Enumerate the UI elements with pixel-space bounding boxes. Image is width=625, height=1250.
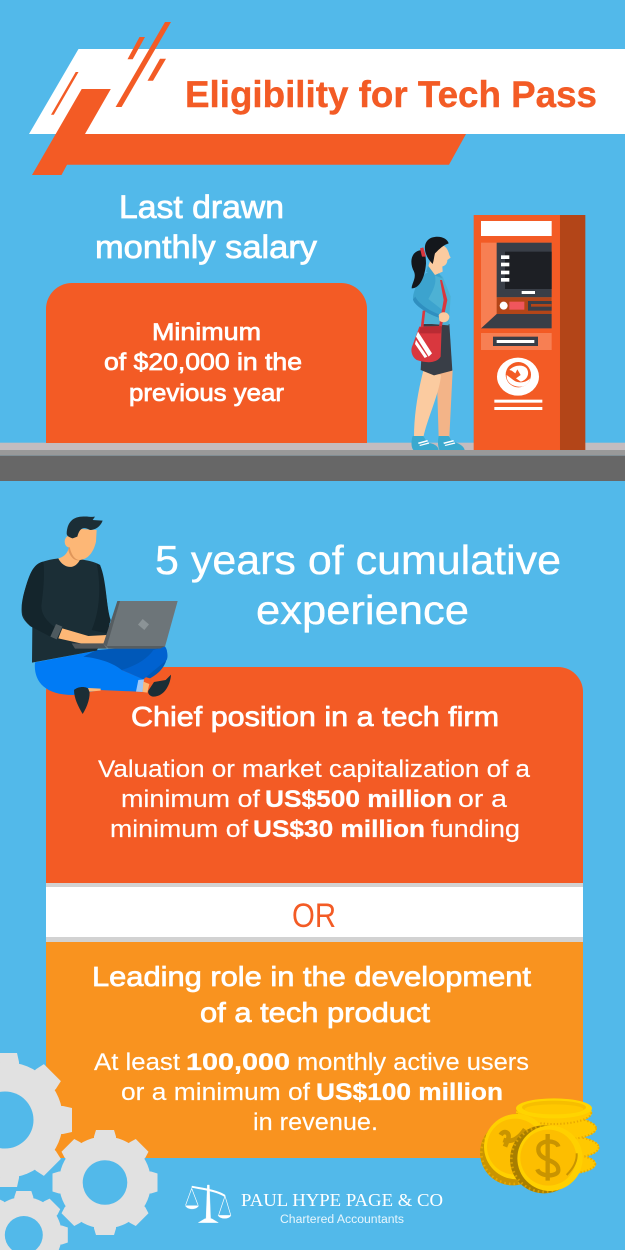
leading role heading: Leading role in the development (92, 961, 531, 992)
panel: chief position (46, 667, 583, 883)
icon: scales (185, 1185, 231, 1223)
heading: last drawn monthly salary: Last drawn (119, 189, 284, 225)
chief position text: minimum of (121, 786, 260, 813)
leading role text (94, 1049, 529, 1136)
OR divider (46, 883, 583, 942)
leading role heading (92, 961, 531, 1028)
leading role text: or a minimum of (121, 1079, 310, 1106)
OR divider: OR (292, 897, 336, 935)
logo: Paul Hype Page & Co (185, 1185, 443, 1226)
salary text: Minimum (152, 319, 261, 346)
chief position text: US$500 million (265, 786, 452, 813)
icon: gold coins (480, 1098, 599, 1193)
chief position text (98, 756, 531, 843)
leading role text: 100,000 (186, 1049, 290, 1076)
leading role text: US$100 million (316, 1079, 503, 1106)
chief position text: or a (458, 786, 508, 813)
chief position heading: Chief position in a tech firm (131, 701, 499, 732)
salary text: of $20,000 in the (104, 349, 302, 376)
salary text (104, 319, 302, 407)
panel: salary (46, 283, 367, 443)
title banner (29, 22, 625, 175)
tagline: Chartered Accountants (280, 1214, 404, 1226)
icon: man with laptop (22, 516, 178, 714)
panel: leading role (46, 942, 583, 1158)
title: Eligibility for Tech Pass (185, 74, 597, 115)
salary text: previous year (129, 380, 284, 407)
heading: last drawn monthly salary: monthly salary (95, 229, 317, 265)
leading role text: monthly active users (297, 1049, 529, 1076)
leading role text: in revenue. (253, 1109, 378, 1136)
chief position text: Valuation or market capitalization of a (98, 756, 531, 783)
chief position text: US$30 million (253, 816, 425, 843)
leading role text: At least (94, 1049, 180, 1076)
heading: last drawn monthly salary (95, 189, 317, 265)
icon: ATM machine (474, 215, 585, 450)
ground (0, 443, 625, 481)
company name: PAUL HYPE PAGE & CO (241, 1190, 443, 1210)
heading: 5 years of cumulative experience: 5 years of cumulative (155, 537, 561, 583)
heading: 5 years of cumulative experience (155, 537, 561, 633)
icon: medium gear (52, 1130, 158, 1235)
chief position text: funding (431, 816, 520, 843)
icon: small gear (0, 1191, 68, 1250)
heading: 5 years of cumulative experience: experience (256, 587, 469, 633)
leading role heading: of a tech product (200, 997, 430, 1028)
chief position text: minimum of (110, 816, 248, 843)
icon: woman at ATM (411, 237, 465, 450)
icon: large gear (0, 1053, 72, 1187)
